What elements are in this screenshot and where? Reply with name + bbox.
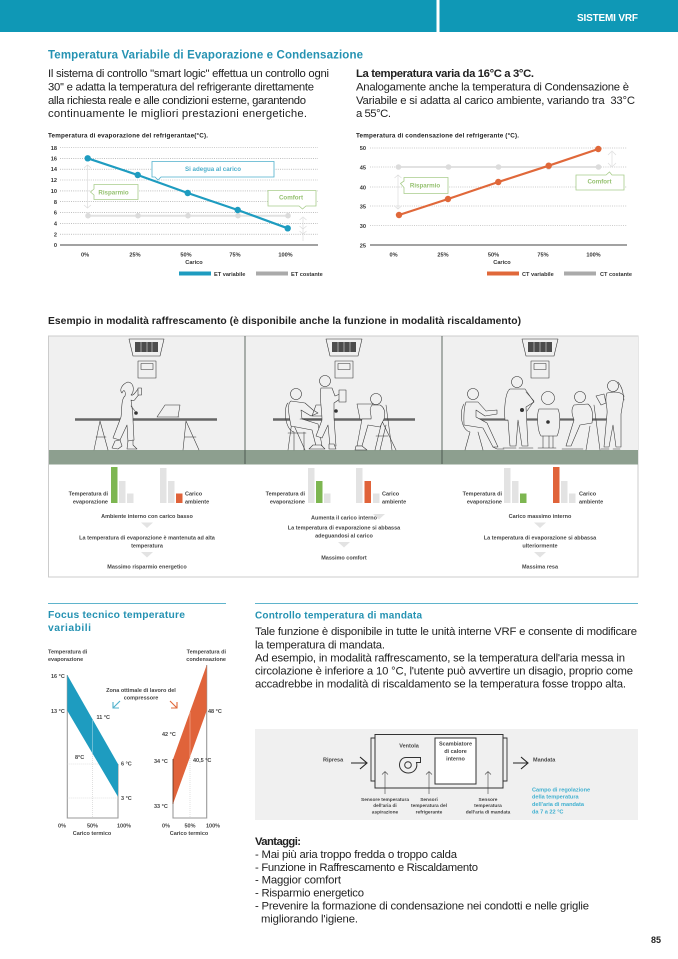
chart: condensation range: 0% [162, 824, 170, 830]
chart: evaporation range: 11 °C [96, 715, 110, 721]
chart: evaporation range: 100% [117, 824, 131, 830]
arrow: intake [323, 757, 367, 769]
text block: temperature range [356, 68, 635, 120]
chart: condensation range: 48 °C [208, 709, 222, 715]
callout: regulation range: della temperatura [532, 794, 580, 800]
sensor labels: dell'aria di [373, 803, 397, 809]
chart: condensation range: 50% [184, 824, 196, 830]
chart: evaporation range: 16 °C [51, 674, 65, 680]
panel: focus tecnico [48, 603, 226, 837]
sensor labels: temperatura del [411, 803, 447, 809]
text block: smart logic [48, 68, 329, 120]
chart: condensation range: 34 °C [154, 759, 168, 765]
chart: evaporation range: 6 °C [121, 762, 132, 768]
text block: advantages: - Risparmio energetico [255, 888, 364, 900]
chart: condensation range: 100% [206, 824, 220, 830]
sensor labels: Sensore temperatura [361, 797, 409, 803]
text block: advantages: - Mai più aria troppo fredda o troppo calda [255, 849, 458, 861]
text block: scene 1 flow: Massimo risparmio energetico [107, 564, 187, 570]
chart: condensation temperature: Carico [493, 260, 511, 266]
chart: evaporation temperature: 75% [229, 252, 241, 258]
chart: evaporation temperature: 25% [129, 252, 141, 258]
chart: evaporation temperature: 14 [51, 167, 58, 173]
chart: evaporation temperature: 0 [54, 243, 57, 249]
chart: evaporation range: Carico termico [73, 831, 112, 837]
text block: description: Tale funzione è disponibile in tutte le unità interne VRF e consente di modificare [255, 626, 637, 638]
chart: condensation temperature: 45 [360, 166, 366, 172]
callout: risparmio: Risparmio [410, 182, 440, 190]
text block: smart logic: alla richiesta reale e alle condizioni esterne, garantendo [48, 95, 306, 107]
sensor labels: Sensori [420, 797, 438, 803]
chart: condensation temperature: 25% [437, 252, 449, 258]
legend: CT costante [600, 272, 632, 278]
text block: temperature range: Analogamente anche la temperatura di Condensazione è [356, 82, 629, 94]
text block: temperature range: La temperatura varia da 16°C a 3°C. [356, 68, 534, 80]
sensor labels: aspirazione [372, 810, 399, 816]
callout: regulation range: Campo di regolazione [532, 788, 590, 794]
scene 1: one person at desk [75, 339, 217, 450]
icon: ceiling unit [129, 339, 164, 356]
person seated right [355, 394, 392, 450]
panel: supply temperature control [255, 603, 638, 926]
icon: fan [400, 758, 420, 773]
text block: advantages: - Prevenire la formazione di condensazione nei condotti e nelle griglie [255, 900, 589, 912]
text block: smart logic: continuamente le migliori prestazioni energetiche. [48, 108, 307, 120]
icon: ceiling unit [522, 339, 558, 356]
label: optimal zone: Zona ottimale di lavoro del [106, 688, 176, 694]
text block: scene 2 flow: Massimo comfort [321, 556, 367, 562]
bars: scene 2 [266, 468, 406, 506]
bars: scene 1 [69, 467, 209, 506]
text block: scene 3 flow: Carico massimo interno [509, 514, 572, 520]
text block: description: circolazione è inferiore a 10 °C, l'utente può avvertire un disagio, proprio come [255, 666, 633, 678]
chart: condensation temperature: 75% [537, 252, 549, 258]
chart: condensation range: 42 °C [162, 732, 176, 738]
chart: condensation range: 40,5 °C [193, 758, 211, 764]
text block: advantages: migliorando l'igiene. [261, 914, 358, 926]
chart: evaporation temperature: 16 [51, 156, 57, 162]
person seated right [562, 392, 600, 450]
icon: thermostat [335, 361, 353, 378]
callout: comfort: Comfort [587, 178, 612, 186]
text block: scene 3 flow: La temperatura di evaporazione si abbassa [484, 536, 597, 542]
callout: si adegua al carico: Si adegua al carico [185, 166, 241, 173]
chart: evaporation range [48, 650, 132, 837]
icon: thermostat [138, 361, 156, 378]
sensor labels [361, 772, 511, 816]
text block: advantages: - Maggior comfort [255, 874, 342, 886]
chart: evaporation temperature: 10 [51, 189, 57, 195]
bars: scene 3: Temperatura di [463, 492, 502, 498]
callout: regulation range: dell'aria di mandata [532, 802, 585, 808]
text block: scene 3 flow [484, 514, 597, 570]
chart: evaporation temperature: 50% [180, 252, 192, 258]
bars: scene 1: evaporazione [73, 500, 108, 506]
sensor labels: temperatura [474, 803, 502, 809]
bars: scene 2: Temperatura di [266, 492, 305, 498]
chart: evaporation range: 50% [87, 824, 98, 830]
chart: condensation temperature: 25 [360, 244, 366, 250]
text block: temperature range: a 55°C. [356, 108, 391, 120]
sensor labels: Sensore [479, 797, 498, 803]
callout: risparmio [400, 178, 448, 194]
bars: scene 1: ambiente [185, 500, 209, 506]
person standing middle [316, 376, 346, 449]
chart: condensation range: Carico termico [170, 831, 209, 837]
page number: 85 [651, 935, 661, 945]
arrow: supply [513, 757, 556, 769]
legend [179, 272, 323, 278]
person standing with tablet [596, 380, 624, 449]
diagram: indoor unit [255, 729, 638, 820]
chart: condensation temperature: 50% [488, 252, 499, 258]
label: optimal zone: compressore [124, 696, 158, 702]
text block: scene 2 flow [288, 514, 401, 562]
heat exchanger: Scambiatore [439, 742, 472, 748]
arrow: blue [113, 701, 120, 708]
sensor labels: refrigerante [416, 810, 443, 816]
bars: scene 3: Carico [579, 492, 597, 498]
chart: condensation temperature: 50 [360, 146, 366, 152]
chart: evaporation range: 3 °C [121, 796, 132, 802]
bars: scene 2: Carico [382, 492, 400, 498]
bars: scene 3: evaporazione [467, 500, 502, 506]
arrow: intake: Ripresa [323, 758, 344, 764]
text block: scene 1 flow [79, 514, 216, 570]
chart: condensation temperature: 0% [389, 252, 398, 258]
chart: condensation range: condensazione [186, 657, 226, 663]
heat exchanger [435, 738, 476, 784]
text block: description: Ad esempio, in modalità raffrescamento, se la temperatura dell'aria messa in [255, 652, 625, 664]
chart: evaporation range: Temperatura di [48, 650, 88, 656]
arrow: orange [170, 701, 177, 708]
chart: evaporation temperature: 6 [54, 210, 57, 216]
bars: scene 2: evaporazione [270, 500, 305, 506]
chart: condensation temperature: Temperatura di condensazione del refrigerante (°C). [356, 132, 519, 140]
person seated centre front [538, 392, 560, 448]
text block: scene 2 flow: adeguandosi al carico [315, 534, 374, 540]
arrow: supply: Mandata [533, 758, 556, 764]
heat exchanger: interno [446, 756, 465, 762]
icon: thermostat [531, 361, 549, 378]
chart: condensation temperature: 30 [360, 224, 366, 230]
callout: regulation range [532, 788, 590, 816]
legend [487, 272, 632, 278]
legend: CT variabile [522, 272, 554, 278]
chart: evaporation temperature: 100% [278, 252, 293, 258]
heading: focus tecnico [48, 610, 185, 634]
text block: scene 2 flow: La temperatura di evaporazione si abbassa [288, 526, 401, 532]
text block: scene 1 flow: La temperatura di evaporazione è mantenuta ad alta [79, 536, 216, 542]
panel: cooling example scenes [48, 336, 638, 577]
header bar: SISTEMI VRF [577, 13, 638, 24]
text block: advantages: - Funzione in Raffrescamento e Riscaldamento [255, 862, 478, 874]
chart: condensation range: 33 °C [154, 804, 168, 810]
chart: evaporation temperature: 18 [51, 146, 57, 152]
legend: ET variabile [214, 272, 245, 278]
chart: condensation temperature: 35 [360, 204, 366, 210]
bars: scene 3 [463, 467, 603, 506]
callout: regulation range: da 7 a 22 °C [532, 810, 563, 816]
bars: scene 1: Carico [185, 492, 203, 498]
text block: advantages: Vantaggi: [255, 836, 301, 848]
text block: description [255, 626, 637, 690]
chart: evaporation temperature: 4 [54, 222, 58, 228]
text block: smart logic: 30'' e adatta la temperatura del refrigerante direttamente [48, 82, 314, 94]
callout: comfort [268, 190, 316, 209]
chart: evaporation temperature: Carico [185, 260, 203, 266]
callout: si adegua al carico [152, 162, 274, 180]
chart: condensation temperature: 40 [360, 186, 366, 192]
text block: description: la temperatura di mandata. [255, 640, 385, 652]
text block: scene 3 flow: ulteriormente [522, 544, 558, 550]
callout: risparmio [90, 184, 138, 200]
chart: evaporation temperature: 2 [54, 232, 57, 238]
person seated far left [461, 388, 504, 450]
person standing centre [503, 376, 534, 448]
callout: risparmio: Risparmio [98, 190, 129, 196]
text block: smart logic: Il sistema di controllo "smart logic" effettua un controllo ogni [48, 68, 329, 80]
sensor labels: dell'aria di mandata [466, 810, 511, 816]
heat exchanger: di calore [444, 749, 467, 755]
heading: focus tecnico: Focus tecnico temperature [48, 610, 185, 621]
diagram: indoor unit: Ventola [399, 744, 420, 750]
chart: condensation range: Temperatura di [187, 650, 226, 656]
chart: evaporation range: 13 °C [51, 709, 65, 715]
heading: controllo temperatura di mandata: Controllo temperatura di mandata [255, 610, 422, 622]
chart: condensation range [154, 650, 226, 837]
chart: evaporation temperature [48, 132, 323, 278]
chart: evaporation temperature: Temperatura di evaporazione del refrigerantae(°C). [48, 132, 208, 140]
label: optimal zone [106, 688, 176, 702]
callout: comfort: Comfort [279, 194, 303, 202]
scene 3: meeting with five people [461, 339, 624, 450]
text block: scene 1 flow: temperatura [131, 544, 164, 550]
text block: scene 1 flow: Ambiente interno con carico basso [101, 514, 193, 520]
bars: scene 1: Temperatura di [69, 492, 108, 498]
text block: advantages [255, 836, 589, 926]
chart: evaporation temperature: 0% [81, 252, 89, 258]
chart: evaporation temperature: 12 [51, 178, 57, 184]
chart: evaporation range: evaporazione [48, 657, 83, 663]
text block: description: accadrebbe in modalità di riscaldamento se la temperatura fosse troppo alta. [255, 678, 626, 690]
text block: scene 3 flow: Massima resa [522, 564, 559, 570]
chart: condensation temperature: 100% [586, 252, 601, 258]
header bar [0, 0, 678, 32]
title: variable temperature: Temperatura Variabile di Evaporazione e Condensazione [48, 50, 363, 62]
icon: ceiling unit [326, 339, 362, 356]
callout: comfort [576, 172, 624, 190]
person seated left [285, 388, 328, 450]
bars: scene 3: ambiente [579, 500, 603, 506]
legend: ET costante [291, 272, 323, 278]
text block: temperature range: Variabile e si adatta al carico ambiente, variando tra 33°C [356, 95, 635, 107]
heading: focus tecnico: variabili [48, 623, 91, 634]
chart: evaporation range: 0% [58, 824, 66, 830]
heading: cooling example: Esempio in modalità raffrescamento (è disponibile anche la funzione in modalità riscaldamento) [48, 316, 521, 327]
person standing [112, 382, 142, 449]
bars: scene 2: ambiente [382, 500, 406, 506]
chart: evaporation temperature: 8 [54, 200, 57, 206]
chart: condensation temperature [356, 132, 632, 278]
scene 2: two people working [273, 339, 415, 450]
text block: scene 2 flow: Aumenta il carico interno [311, 516, 378, 522]
chart: evaporation range: 8°C [75, 755, 84, 761]
